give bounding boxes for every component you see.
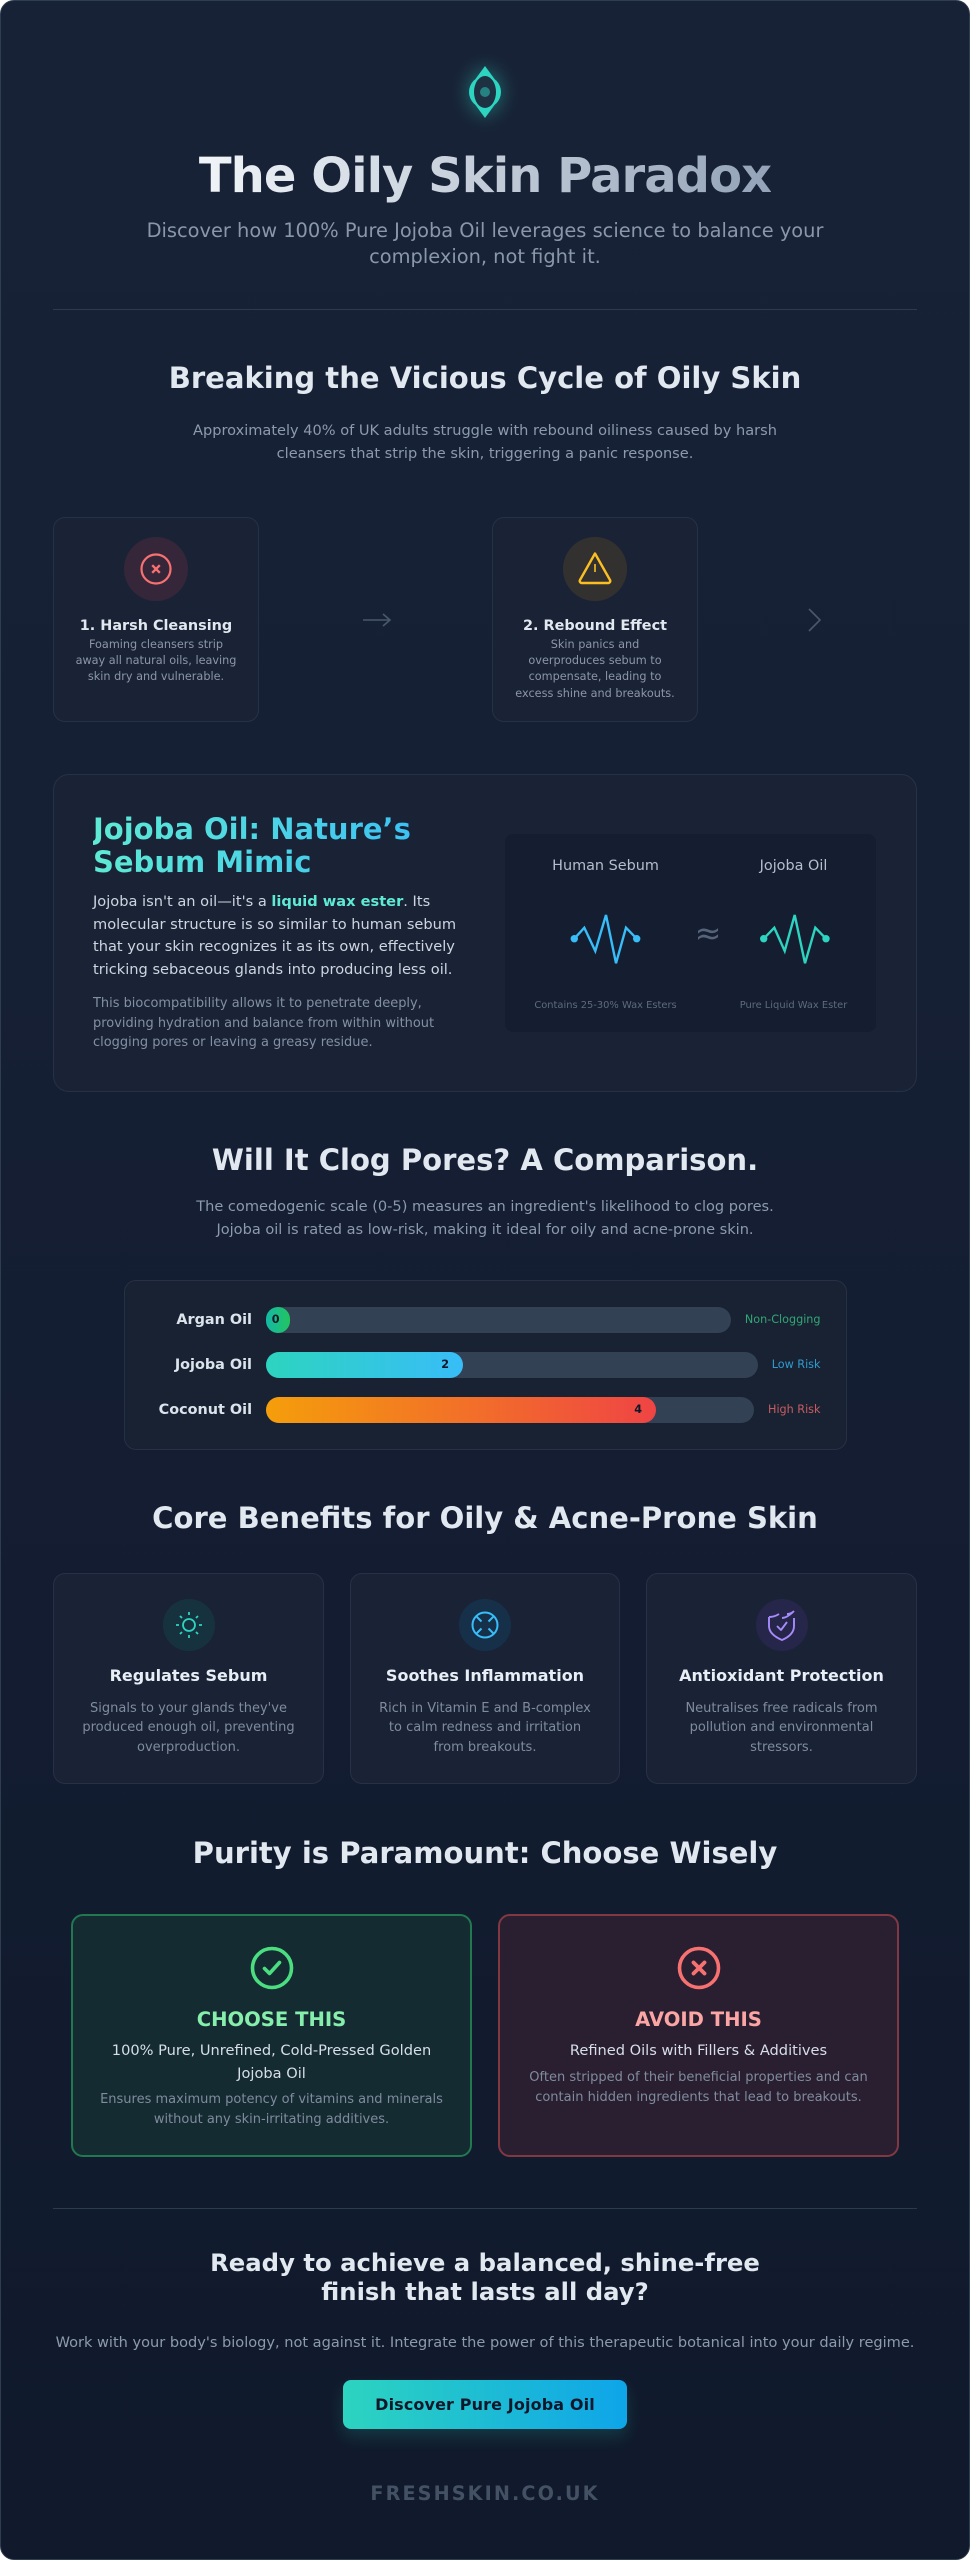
button: Discover Pure Jojoba Oil bbox=[375, 2395, 595, 2414]
call to action bbox=[56, 2248, 914, 2440]
label: jojoba oil: Jojoba Oil bbox=[760, 858, 827, 874]
step card: rebound effect bbox=[492, 517, 698, 722]
step text: excess shine and breakouts. bbox=[515, 687, 675, 700]
intro text: The comedogenic scale (0-5) measures an ingredient's likelihood to clog pores. bbox=[196, 1198, 774, 1215]
icon: sun bbox=[162, 1599, 214, 1651]
bar: argan oil: 0 bbox=[272, 1312, 280, 1326]
icon: warning triangle bbox=[563, 537, 627, 601]
subtitle: complexion, not fight it. bbox=[369, 245, 601, 268]
icon: calming circle bbox=[459, 1599, 511, 1651]
label: human sebum: Human Sebum bbox=[552, 858, 659, 874]
bar: coconut oil bbox=[159, 1397, 820, 1423]
benefit text: Signals to your glands they've bbox=[90, 1701, 287, 1716]
icon: cross circle bbox=[678, 1946, 720, 1990]
bar: coconut oil: High Risk bbox=[768, 1402, 820, 1416]
step text: skin dry and vulnerable. bbox=[88, 670, 224, 683]
benefit text: Rich in Vitamin E and B-complex bbox=[379, 1701, 591, 1716]
panel: avoid this bbox=[498, 1914, 899, 2157]
step text: overproduces sebum to bbox=[528, 654, 662, 667]
approx symbol: ≈ bbox=[695, 914, 721, 952]
icon: check circle bbox=[250, 1946, 294, 1990]
step text: away all natural oils, leaving bbox=[76, 654, 236, 667]
bar: jojoba oil: Jojoba Oil bbox=[175, 1356, 252, 1372]
benefit title: Soothes Inflammation bbox=[386, 1666, 584, 1685]
bar: jojoba oil: Low Risk bbox=[772, 1358, 820, 1370]
panel: choose this bbox=[71, 1914, 472, 2157]
intro text bbox=[193, 422, 777, 462]
card main line: Refined Oils with Fillers & Additives bbox=[570, 2042, 827, 2059]
subtitle bbox=[147, 219, 824, 268]
card main line bbox=[112, 2042, 431, 2082]
step card: harsh cleansing bbox=[53, 517, 259, 722]
intro text: Approximately 40% of UK adults struggle with rebound oiliness caused by harsh bbox=[193, 422, 777, 439]
secondary text: clogging pores or leaving a greasy residue. bbox=[93, 1035, 373, 1050]
header bbox=[147, 61, 824, 268]
secondary text: This biocompatibility allows it to penetrate deeply, bbox=[93, 996, 422, 1011]
benefit text: Neutralises free radicals from bbox=[685, 1701, 878, 1716]
body text: Jojoba isn't an oil—it's a liquid wax ester. Its bbox=[93, 893, 430, 910]
section: vicious cycle bbox=[53, 361, 821, 722]
intro text bbox=[196, 1198, 774, 1238]
section: comparison bbox=[124, 1143, 847, 1450]
heading: Will It Clog Pores? A Comparison. bbox=[212, 1143, 758, 1177]
caption: human sebum: Contains 25-30% Wax Esters bbox=[534, 1000, 677, 1011]
icon: shield bbox=[756, 1599, 808, 1651]
benefit text: to calm redness and irritation bbox=[389, 1720, 581, 1735]
card title: CHOOSE THIS bbox=[197, 2008, 346, 2031]
secondary text: providing hydration and balance from within without bbox=[93, 1016, 434, 1030]
benefit card: regulates sebum bbox=[53, 1573, 324, 1784]
button bbox=[343, 2380, 627, 2429]
benefit text bbox=[82, 1701, 295, 1755]
bar: argan oil: Non-Clogging bbox=[745, 1312, 820, 1326]
card title: AVOID THIS bbox=[635, 2008, 762, 2031]
step title: 1. Harsh Cleansing bbox=[80, 618, 232, 634]
body text: tricking sebaceous glands into producing less oil. bbox=[93, 961, 452, 978]
intro text: cleansers that strip the skin, triggering a panic response. bbox=[277, 445, 693, 462]
card text: without any skin-irritating additives. bbox=[154, 2112, 389, 2126]
caption: jojoba oil: Pure Liquid Wax Ester bbox=[740, 1000, 847, 1011]
benefit card: soothes inflammation bbox=[350, 1573, 620, 1784]
benefit title: Antioxidant Protection bbox=[679, 1666, 884, 1685]
benefit card: antioxidant protection bbox=[646, 1573, 917, 1784]
arrow: chevron bbox=[808, 608, 821, 632]
heading: Breaking the Vicious Cycle of Oily Skin bbox=[169, 361, 801, 395]
cta heading: Ready to achieve a balanced, shine-free bbox=[210, 2248, 760, 2277]
body text: that your skin recognizes it as its own, effectively bbox=[93, 938, 455, 955]
panel heading bbox=[93, 813, 455, 879]
card main line: Jojoba Oil bbox=[237, 2065, 306, 2082]
step text bbox=[515, 638, 675, 700]
card main line: 100% Pure, Unrefined, Cold-Pressed Golden bbox=[112, 2042, 431, 2059]
section: core benefits bbox=[53, 1501, 917, 1784]
bar: coconut oil: Coconut Oil bbox=[159, 1402, 252, 1418]
body text bbox=[92, 893, 456, 978]
subtitle: Discover how 100% Pure Jojoba Oil leverages science to balance your bbox=[147, 219, 823, 242]
heading: Core Benefits for Oily & Acne-Prone Skin bbox=[152, 1501, 818, 1535]
heading: purity: Purity is Paramount: Choose Wisely bbox=[193, 1836, 777, 1870]
panel: jojoba sebum mimic bbox=[53, 774, 917, 1092]
card text bbox=[529, 2070, 868, 2104]
icon: cross circle bbox=[124, 537, 188, 601]
card text: Ensures maximum potency of vitamins and minerals bbox=[100, 2092, 443, 2107]
waves bbox=[570, 914, 830, 964]
secondary text bbox=[92, 996, 434, 1050]
panel heading: Jojoba Oil: Nature’s bbox=[93, 812, 411, 846]
bar: coconut oil: 4 bbox=[634, 1402, 642, 1416]
benefit text: pollution and environmental bbox=[690, 1720, 873, 1735]
benefit text bbox=[379, 1701, 591, 1755]
step text: Foaming cleansers strip bbox=[89, 638, 223, 651]
card text: Often stripped of their beneficial properties and can bbox=[529, 2070, 868, 2085]
body text: molecular structure is so similar to human sebum bbox=[93, 916, 456, 933]
cta text: Work with your body's biology, not against it. Integrate the power of this therapeutic botanical into your daily regime. bbox=[56, 2334, 914, 2351]
cta heading: finish that lasts all day? bbox=[321, 2277, 649, 2306]
panel heading: Sebum Mimic bbox=[93, 845, 311, 879]
card text bbox=[100, 2092, 443, 2126]
icon: oil drop emblem bbox=[459, 61, 511, 123]
cta heading bbox=[210, 2248, 760, 2306]
benefit text: produced enough oil, preventing bbox=[82, 1720, 295, 1735]
bar: jojoba oil: 2 bbox=[441, 1358, 449, 1370]
benefit title: Regulates Sebum bbox=[110, 1666, 267, 1685]
card text: contain hidden ingredients that lead to breakouts. bbox=[535, 2090, 862, 2104]
benefit text bbox=[685, 1701, 878, 1755]
step text: Skin panics and bbox=[551, 638, 639, 651]
benefit text: overproduction. bbox=[137, 1740, 240, 1755]
bar: argan oil: Argan Oil bbox=[176, 1312, 252, 1328]
step text bbox=[76, 638, 236, 683]
step text: compensate, leading to bbox=[529, 670, 661, 683]
intro text: Jojoba oil is rated as low-risk, making it ideal for oily and acne-prone skin. bbox=[216, 1221, 754, 1238]
title: The Oily Skin Paradox bbox=[199, 148, 771, 204]
molecular comparison diagram bbox=[504, 834, 876, 1032]
bar: jojoba oil bbox=[174, 1352, 820, 1378]
benefit text: stressors. bbox=[750, 1740, 813, 1755]
arrow bbox=[363, 614, 391, 626]
footer brand: FRESHSKIN.CO.UK bbox=[370, 2482, 600, 2505]
bar chart bbox=[124, 1280, 846, 1450]
bar: argan oil bbox=[176, 1307, 820, 1333]
benefit text: from breakouts. bbox=[434, 1740, 536, 1755]
step title: 2. Rebound Effect bbox=[523, 618, 667, 634]
